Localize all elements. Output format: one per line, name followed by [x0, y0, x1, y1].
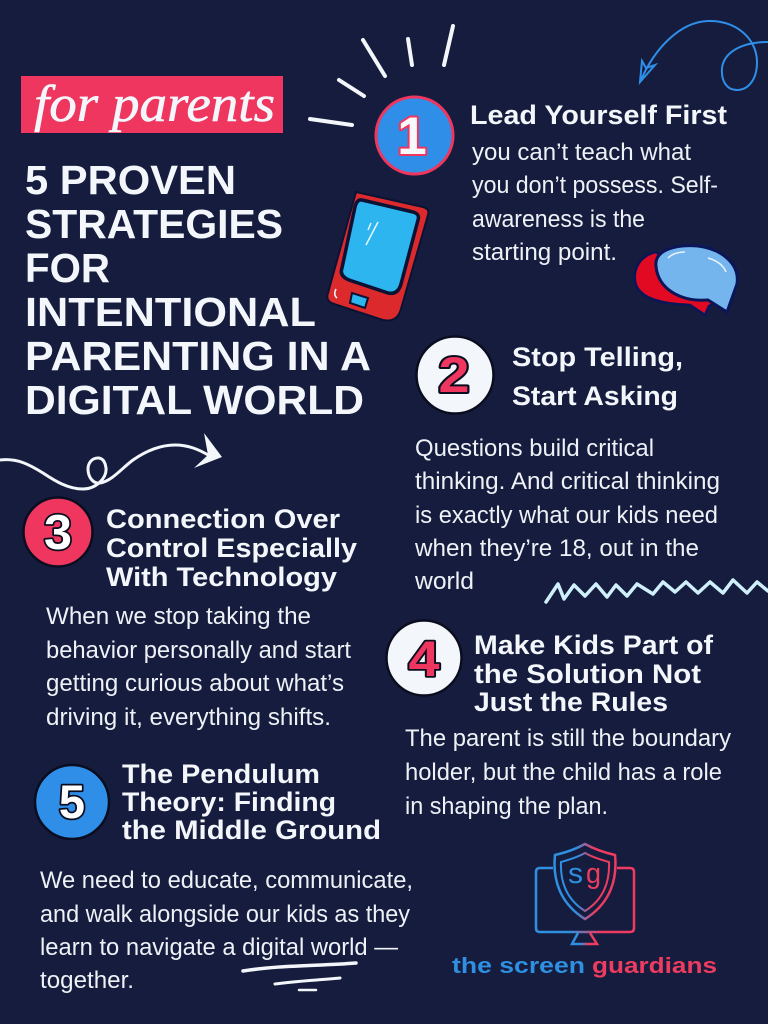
step 2 badge: 2 — [438, 347, 470, 403]
title: FOR — [25, 245, 110, 291]
step 5 badge — [35, 765, 109, 839]
step 3 heading — [106, 504, 357, 592]
step 3 text: getting curious about what’s — [46, 670, 344, 697]
logo shield — [555, 844, 615, 919]
step 2 heading — [512, 342, 683, 411]
logo shield: g — [586, 858, 601, 890]
step 3 text: behavior personally and start — [46, 637, 351, 664]
icon: speech bubbles — [635, 246, 737, 315]
arrow: blue loop — [640, 21, 768, 90]
step 1 badge — [376, 97, 453, 174]
step 1 text — [472, 139, 718, 266]
step 5 text: together. — [40, 967, 134, 994]
logo: the screen guardians — [452, 844, 717, 978]
step 5 text — [40, 867, 413, 994]
logo monitor — [536, 868, 634, 944]
step 5 heading: The Pendulum — [122, 759, 320, 789]
step 1 text: you can’t teach what — [472, 139, 691, 166]
step 5 badge: 5 — [59, 775, 85, 828]
icon: burst rays — [310, 26, 453, 125]
arrow: white swirl — [0, 433, 222, 489]
logo wordmark — [452, 953, 717, 978]
step 2 badge — [416, 336, 494, 414]
step 1 text: starting point. — [472, 239, 617, 266]
step 2 heading: Start Asking — [512, 381, 678, 411]
step 5 text: and walk alongside our kids as they — [40, 901, 410, 928]
step 4 heading: the Solution Not — [474, 659, 701, 689]
step 3 heading: Control Especially — [106, 533, 357, 563]
step 3 text: driving it, everything shifts. — [46, 704, 331, 731]
title: STRATEGIES — [25, 201, 283, 247]
step 4 badge — [386, 620, 462, 696]
step 1 text: awareness is the — [472, 206, 645, 233]
step 4 text — [405, 725, 731, 820]
decorative underline strokes — [243, 963, 356, 990]
step 3 badge — [24, 498, 92, 566]
step 2 text: when they’re 18, out in the — [414, 535, 699, 562]
decorative squiggle — [546, 580, 768, 602]
step 2 heading: Stop Telling, — [512, 342, 683, 372]
step 3 heading: With Technology — [106, 562, 337, 592]
step 5 text: learn to navigate a digital world — — [40, 934, 398, 961]
step 5 heading: Theory: Finding — [122, 787, 336, 817]
step 4 heading: Make Kids Part of — [474, 630, 714, 660]
step 3 badge: 3 — [44, 506, 72, 560]
step 1 text: you don’t possess. Self- — [472, 172, 718, 199]
step 4 heading — [474, 630, 714, 717]
step 2 text: thinking. And critical thinking — [415, 468, 720, 495]
logo shield: s — [568, 858, 583, 890]
step 4 text: in shaping the plan. — [405, 793, 608, 820]
title: PARENTING IN A — [25, 333, 371, 379]
title: INTENTIONAL — [25, 289, 316, 335]
step 2 text: Questions build critical — [415, 435, 654, 462]
step 1 heading: Lead Yourself First — [470, 100, 727, 130]
logo wordmark: the screen — [452, 953, 585, 978]
step 4 text: holder, but the child has a role — [405, 759, 722, 786]
step 3 text: When we stop taking the — [46, 603, 311, 630]
step 4 text: The parent is still the boundary — [405, 725, 731, 752]
title: 5 PROVEN — [25, 157, 236, 203]
step 4 badge: 4 — [408, 631, 440, 687]
step 5 text: We need to educate, communicate, — [40, 867, 413, 894]
step 2 text: world — [414, 568, 474, 595]
icon: phone — [327, 192, 428, 321]
step 1 badge: 1 — [397, 107, 427, 166]
step 5 heading — [122, 759, 381, 845]
step 2 text: is exactly what our kids need — [415, 502, 718, 529]
step 2 text — [414, 435, 720, 595]
title: DIGITAL WORLD — [25, 377, 364, 423]
title — [25, 157, 371, 423]
step 3 text — [46, 603, 351, 731]
step 5 heading: the Middle Ground — [122, 815, 381, 845]
logo wordmark: guardians — [592, 953, 717, 978]
badge: for parents: for parents — [34, 76, 275, 133]
step 4 heading: Just the Rules — [474, 687, 668, 717]
step 3 heading: Connection Over — [106, 504, 341, 534]
